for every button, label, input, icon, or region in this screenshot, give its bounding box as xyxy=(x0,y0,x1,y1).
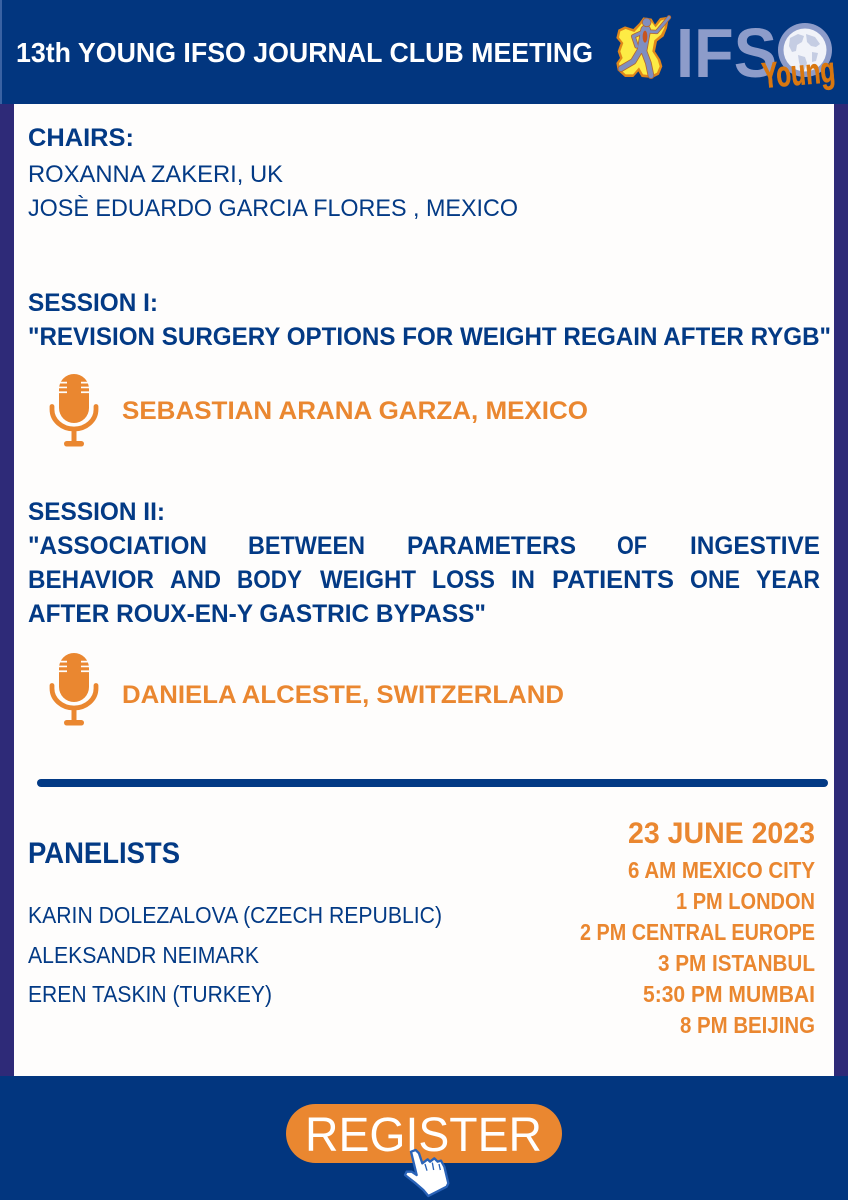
text block: panelists xyxy=(28,837,442,1007)
header title: 13th YOUNG IFSO JOURNAL CLUB MEETING xyxy=(16,37,593,68)
icon: running figure xyxy=(616,17,669,78)
date and times: 1 PM LONDON xyxy=(676,888,815,914)
text block: session II: IN xyxy=(511,566,535,594)
icon: IFSO Young logo: Young xyxy=(760,50,837,96)
right side band xyxy=(834,104,848,1076)
text block: panelists: ALEKSANDR NEIMARK xyxy=(28,942,259,968)
icon: microphone session I xyxy=(52,374,96,446)
date and times: 5:30 PM MUMBAI xyxy=(643,981,815,1007)
text block: session II: OF xyxy=(617,532,647,560)
text block: session II: BEHAVIOR xyxy=(28,566,154,594)
text block: session II: SESSION II: xyxy=(28,498,165,526)
text block: session II: PARAMETERS xyxy=(407,532,576,560)
text block: session II: PATIENTS xyxy=(552,566,674,594)
text block: session I: SESSION I: xyxy=(28,289,158,317)
text block: session II: ONE xyxy=(690,566,740,594)
text block: chairs: ROXANNA ZAKERI, UK xyxy=(28,161,283,188)
text block: session II: AFTER ROUX-EN-Y GASTRIC BYPASS" xyxy=(28,600,486,628)
text block: panelists: EREN TASKIN (TURKEY) xyxy=(28,981,272,1007)
text block: session II: AND xyxy=(170,566,221,594)
text block: session II: BETWEEN xyxy=(248,532,365,560)
text block: session II: "ASSOCIATION xyxy=(28,532,207,560)
date and times: 23 JUNE 2023 xyxy=(628,817,815,850)
icon: IFSO Young logo xyxy=(616,14,837,96)
icon: pointer hand xyxy=(405,1150,448,1196)
date and times: 8 PM BEIJING xyxy=(680,1012,815,1038)
text block: chairs xyxy=(28,124,518,222)
date and times xyxy=(580,817,815,1038)
text block: session II: LOSS xyxy=(432,566,495,594)
date and times: 6 AM MEXICO CITY xyxy=(628,857,815,883)
icon: IFSO Young logo: IFS xyxy=(676,14,777,92)
text block: session I: "REVISION SURGERY OPTIONS FOR WEIGHT REGAIN AFTER RYGB" xyxy=(28,323,831,351)
register button: REGISTER xyxy=(305,1109,542,1162)
text block: session II: YEAR xyxy=(756,566,820,594)
speaker: session I: SEBASTIAN ARANA GARZA, MEXICO xyxy=(122,397,588,425)
text block: session II: WEIGHT xyxy=(320,566,416,594)
date and times: 2 PM CENTRAL EUROPE xyxy=(580,919,815,945)
text block: session II xyxy=(28,498,820,628)
text block: session I xyxy=(28,289,831,351)
icon: microphone session II xyxy=(52,653,96,726)
date and times: 3 PM ISTANBUL xyxy=(658,950,815,976)
panel: main content xyxy=(14,104,834,1076)
text block: session II: BODY xyxy=(237,566,302,594)
text block: chairs: JOSÈ EDUARDO GARCIA FLORES , MEXICO xyxy=(28,195,518,222)
text block: panelists: PANELISTS xyxy=(28,837,180,870)
text block: chairs: CHAIRS: xyxy=(28,124,134,152)
text block: session II: INGESTIVE xyxy=(690,532,820,560)
text block: panelists: KARIN DOLEZALOVA (CZECH REPUBLIC) xyxy=(28,902,442,928)
speaker: session II: DANIELA ALCESTE, SWITZERLAND xyxy=(122,681,564,709)
left side band xyxy=(0,104,14,1076)
